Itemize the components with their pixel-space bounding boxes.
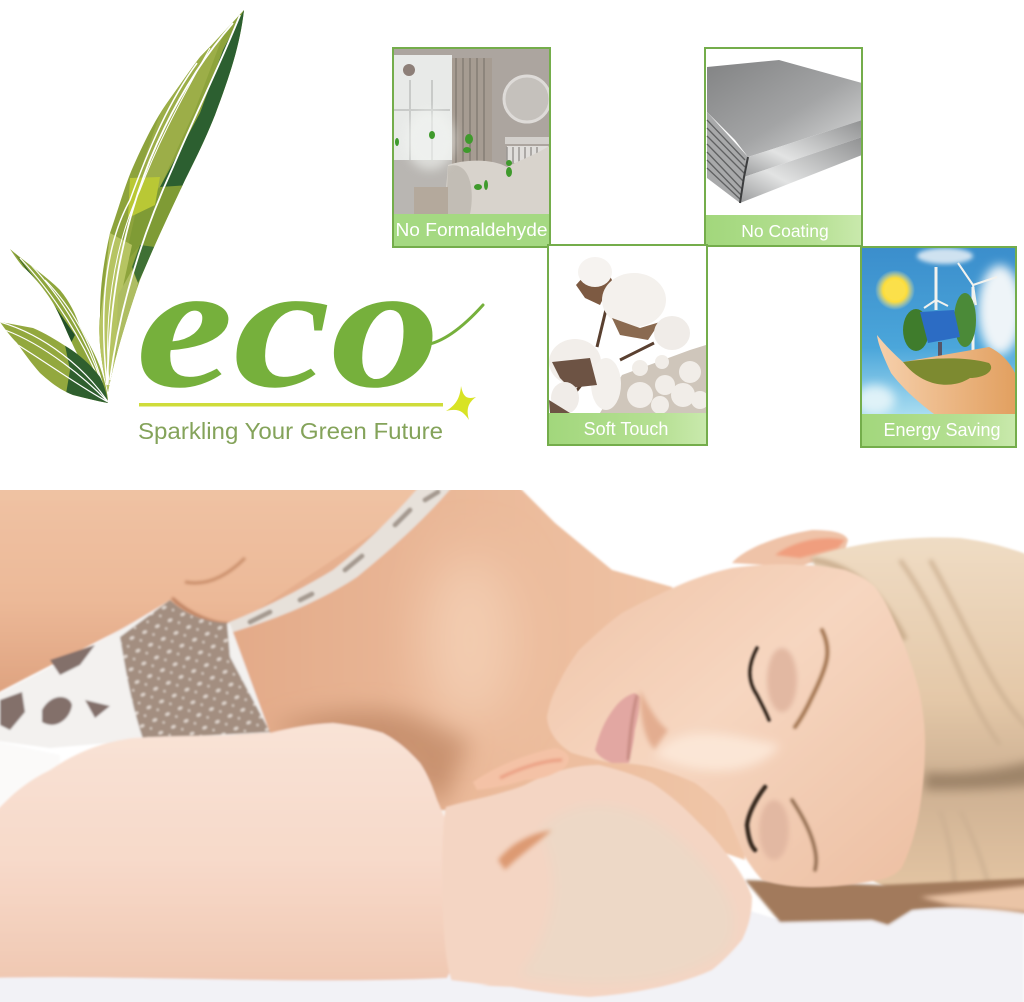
tagline: Sparkling Your Green Future xyxy=(138,418,443,444)
label: Energy Saving xyxy=(883,420,1001,440)
panel: Energy Saving xyxy=(855,247,1022,447)
label: No Formaldehyde xyxy=(396,220,548,240)
mother's ear xyxy=(732,530,848,567)
icon: tall leaf xyxy=(99,10,244,392)
panel: No Coating xyxy=(705,48,862,246)
baby's hair xyxy=(520,805,734,983)
upper eye socket xyxy=(767,648,797,712)
logo: Veco leaf mark and wordmark xyxy=(0,0,483,444)
camisole xyxy=(0,600,270,748)
soft photographic layer xyxy=(0,480,1024,1002)
photo: mother and baby sleeping xyxy=(0,480,1024,1002)
hairline xyxy=(812,560,905,640)
wordmark: eco: eco xyxy=(136,226,440,425)
baby's ear fold xyxy=(500,760,562,778)
nose shading xyxy=(640,690,668,750)
image: cotton xyxy=(549,257,709,414)
mother's lips xyxy=(595,693,640,763)
baby's head xyxy=(442,765,752,997)
panel: No Formaldehyde xyxy=(393,48,550,247)
mother's hair xyxy=(812,537,1024,897)
neck highlight xyxy=(425,555,515,725)
lower eyelashes xyxy=(747,787,765,850)
chest shadows xyxy=(270,710,470,810)
image: hand holding green energy xyxy=(855,248,1022,415)
icon: sparkle star xyxy=(446,386,476,420)
hair shading xyxy=(925,760,1024,790)
image: bedroom xyxy=(394,49,550,214)
mother's neck and chest xyxy=(150,480,745,860)
icon: small lower leaf xyxy=(0,322,108,403)
label: No Coating xyxy=(741,221,829,241)
nose highlight xyxy=(655,733,780,771)
camisole strap xyxy=(227,480,458,632)
mother's arm xyxy=(0,490,415,693)
divider line xyxy=(139,403,443,406)
baby's body xyxy=(0,723,457,981)
panel: Soft Touch xyxy=(548,245,709,445)
baby's reddish scalp patch xyxy=(498,830,552,870)
baby's ear xyxy=(473,748,569,790)
strap pattern xyxy=(250,492,438,622)
upper eyelashes xyxy=(750,648,769,720)
lip line xyxy=(628,695,637,760)
hair strands xyxy=(900,560,1024,895)
image: silver fabric xyxy=(707,60,862,203)
lower eye socket xyxy=(759,800,789,860)
ear inner xyxy=(775,538,845,558)
lower eyebrow xyxy=(792,800,816,870)
mother's face xyxy=(547,564,925,887)
arm crease shadow xyxy=(185,558,245,583)
label: Soft Touch xyxy=(584,419,668,439)
armpit shadow xyxy=(172,598,232,624)
neck area under face xyxy=(745,878,1024,925)
pillow base xyxy=(311,907,1024,1002)
icon: small upper leaf xyxy=(10,249,108,400)
right neck xyxy=(920,885,1024,913)
baby's garment xyxy=(0,740,60,830)
upper eyebrow xyxy=(795,630,827,727)
floral print xyxy=(0,645,110,730)
swash on the letter o xyxy=(425,305,483,345)
left pillow xyxy=(0,977,490,1002)
